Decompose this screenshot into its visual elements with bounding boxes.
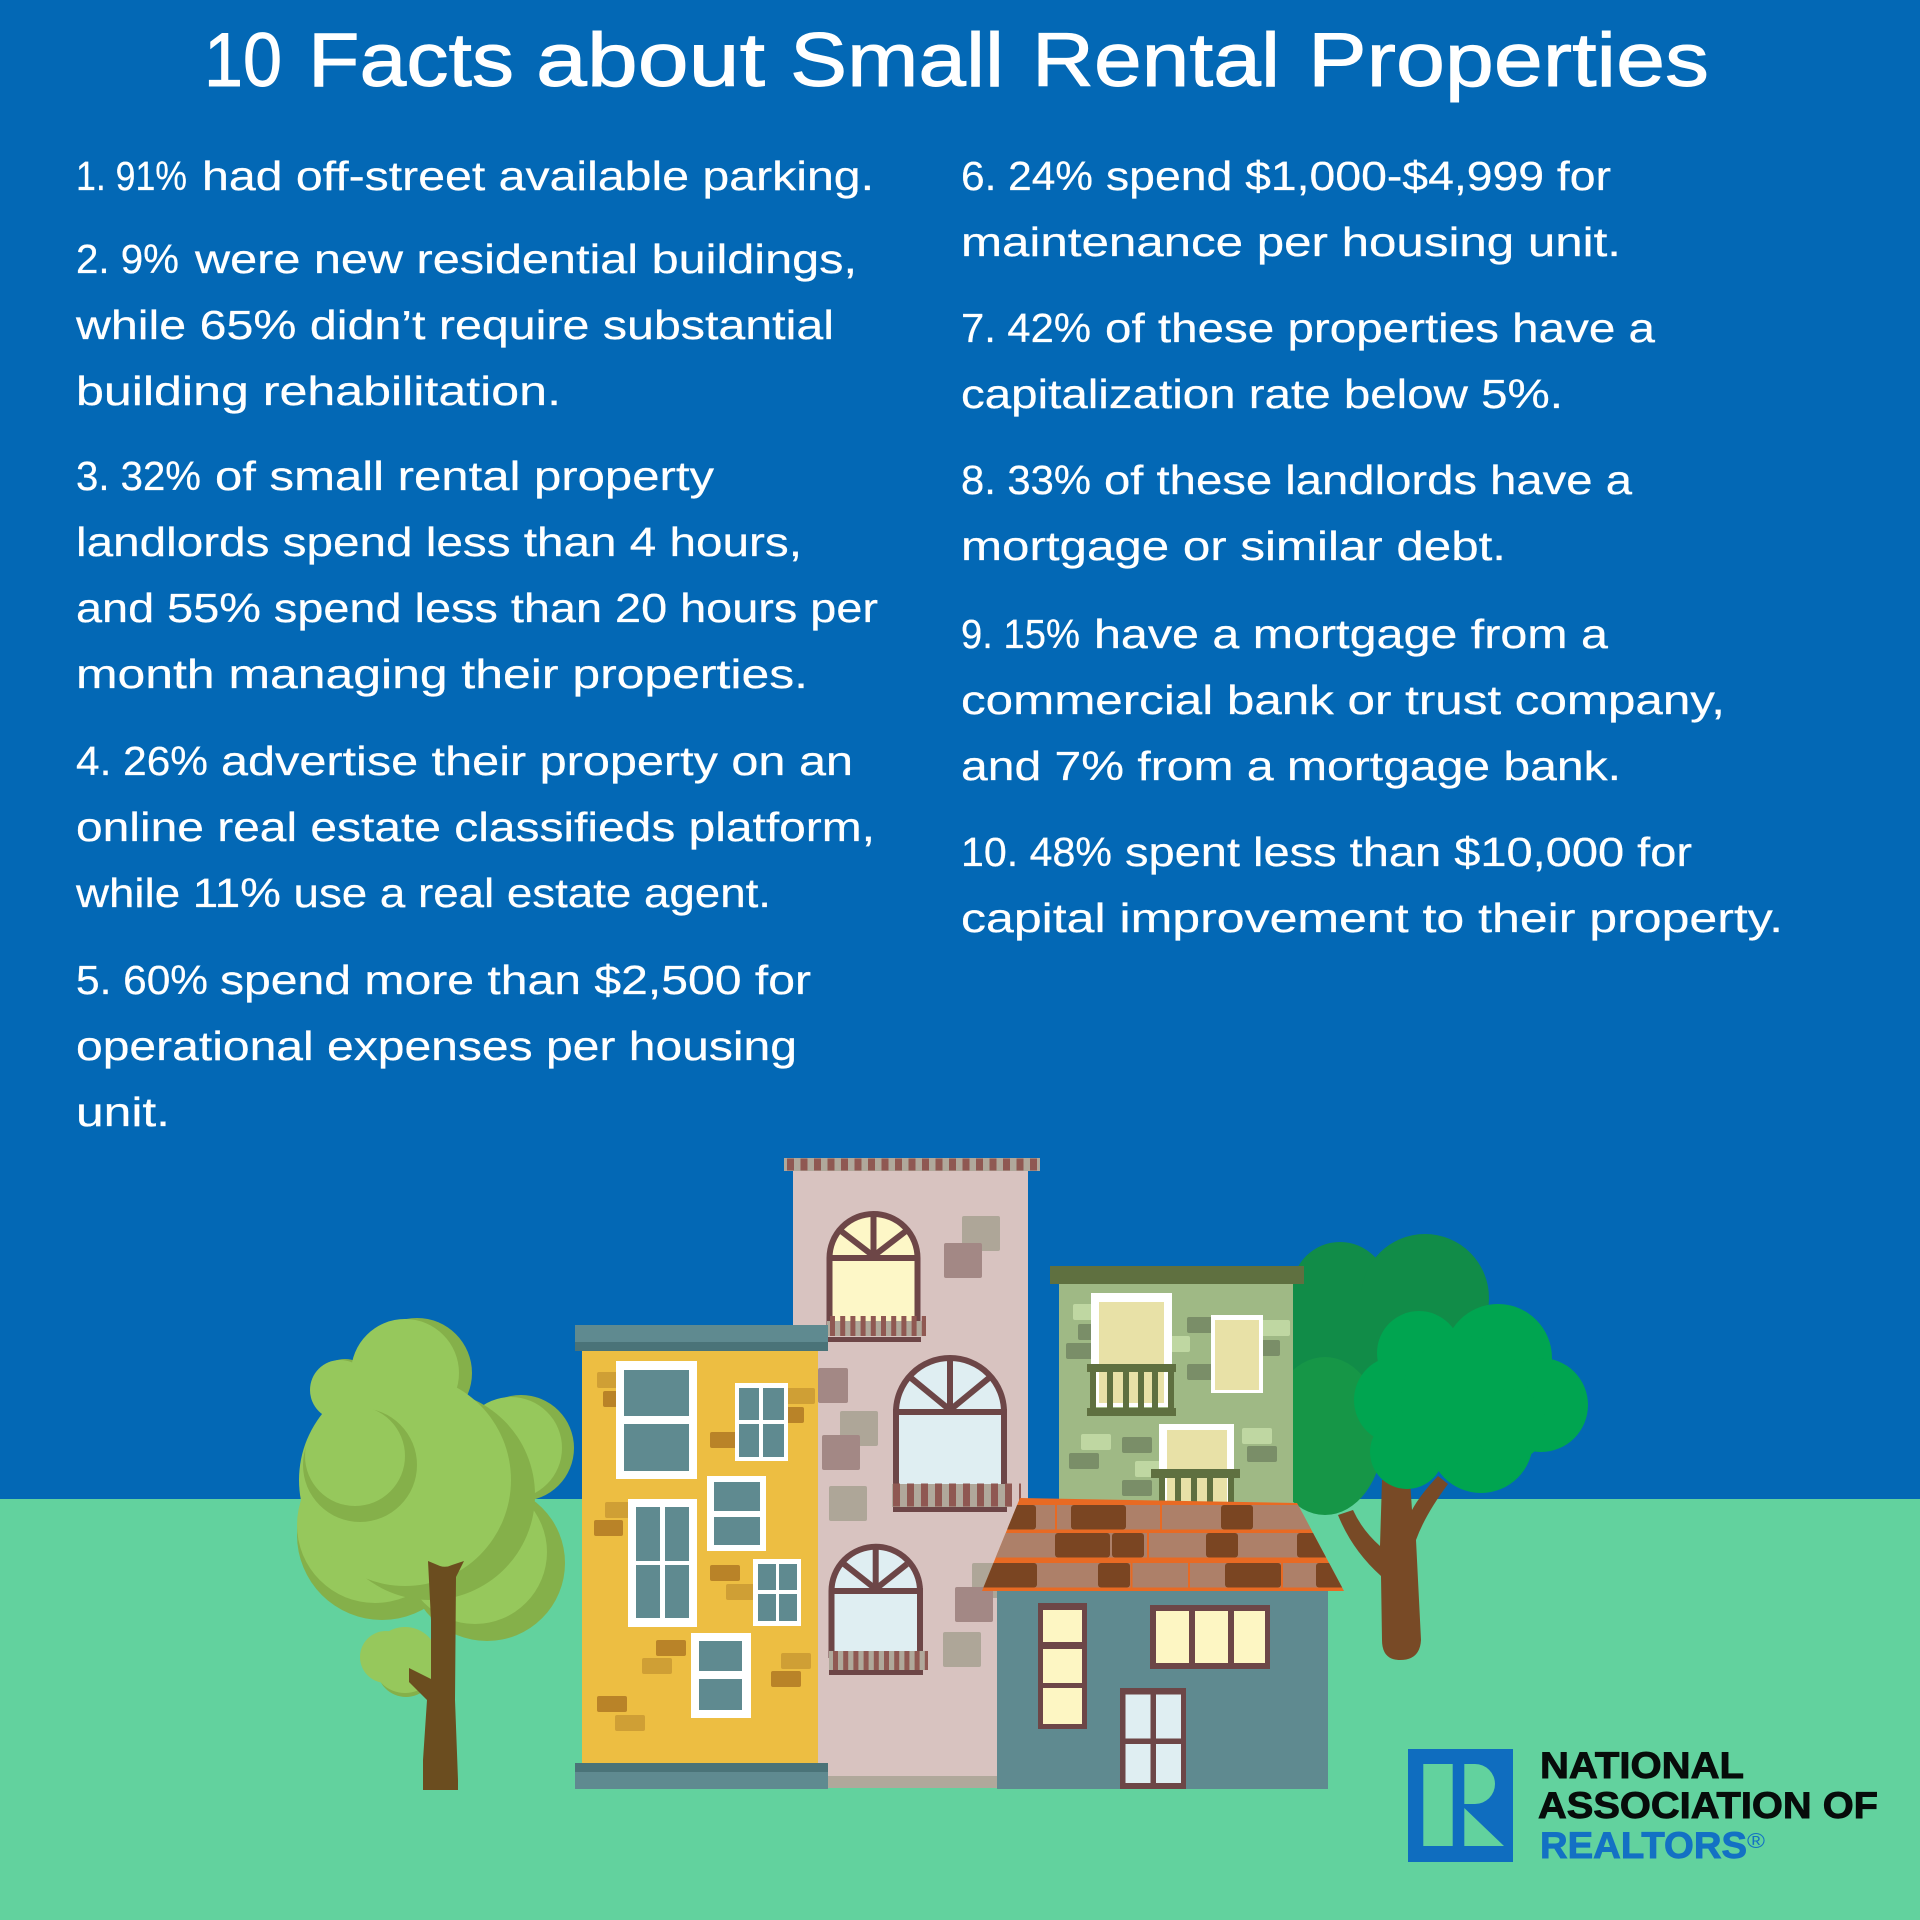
fact 9: have a mortgage from a	[1094, 611, 1608, 657]
fact 10: capital improvement to their property.	[961, 895, 1783, 941]
green building	[1050, 1266, 1304, 1503]
fact 4: while 11% use a real estate agent.	[75, 870, 771, 916]
fact 1: had off-street available parking.	[202, 153, 874, 199]
title: Rental	[1032, 18, 1280, 103]
fact 9: 9. 15%	[961, 611, 1080, 657]
yellow building	[575, 1325, 828, 1789]
logo wordmark: ASSOCIATION OF	[1538, 1785, 1878, 1826]
fact 9	[961, 611, 1725, 789]
arched window top	[827, 1214, 926, 1342]
fact 7	[961, 305, 1655, 417]
fact 7: of these properties have a	[1105, 305, 1655, 351]
title: Facts	[308, 18, 514, 103]
fact 3: 3. 32%	[76, 453, 201, 499]
fact 8: mortgage or similar debt.	[961, 523, 1506, 569]
fact 6: spend $1,000-$4,999 for	[1106, 153, 1611, 199]
logo wordmark: REALTORS	[1540, 1825, 1747, 1866]
house door	[1120, 1688, 1186, 1789]
fact 4: advertise their property on an	[221, 738, 853, 784]
roof	[980, 1498, 1346, 1591]
fact 10: spent less than $10,000 for	[1125, 829, 1692, 875]
fact 2: while 65% didn’t require substantial	[75, 302, 834, 348]
fact 4	[75, 738, 875, 916]
fact 8: 8. 33%	[961, 457, 1091, 503]
fact 2	[75, 236, 857, 414]
fact 3: landlords spend less than 4 hours,	[76, 519, 802, 565]
title: Properties	[1308, 18, 1709, 103]
green building windows and balconies	[1087, 1293, 1263, 1502]
fact 3: of small rental property	[215, 453, 715, 499]
fact 3: month managing their properties.	[76, 651, 808, 697]
ground	[0, 1499, 1920, 1920]
fact 5: 5. 60%	[76, 957, 208, 1003]
fact 5: unit.	[76, 1089, 170, 1135]
fact 2: building rehabilitation.	[76, 368, 561, 414]
fact 6	[961, 153, 1621, 265]
fact 9: commercial bank or trust company,	[961, 677, 1725, 723]
illustration: left tree	[297, 1318, 574, 1790]
logo wordmark: ®	[1747, 1830, 1766, 1853]
yellow building windows	[616, 1361, 801, 1718]
fact 7: 7. 42%	[961, 305, 1091, 351]
fact 9: and 7% from a mortgage bank.	[961, 743, 1621, 789]
fact 5: operational expenses per housing	[76, 1023, 797, 1069]
fact 2: were new residential buildings,	[194, 236, 857, 282]
fact 7: capitalization rate below 5%.	[961, 371, 1563, 417]
fact 8: of these landlords have a	[1104, 457, 1632, 503]
fact 6: 6. 24%	[961, 153, 1093, 199]
fact 1: 1. 91%	[76, 153, 187, 199]
logo: National Association of Realtors	[1408, 1745, 1878, 1866]
house wide window	[1150, 1605, 1270, 1669]
fact 4: online real estate classifieds platform,	[76, 804, 875, 850]
background sky	[0, 0, 1920, 1500]
fact 6: maintenance per housing unit.	[961, 219, 1621, 265]
arched window bottom	[829, 1547, 928, 1675]
pink building	[784, 1158, 1040, 1788]
fact 10: 10. 48%	[961, 829, 1112, 875]
title	[204, 18, 1709, 103]
fact 5: spend more than $2,500 for	[220, 957, 811, 1003]
small house	[980, 1498, 1346, 1789]
illustration: right tree	[1267, 1234, 1588, 1660]
logo wordmark	[1538, 1745, 1878, 1866]
fact 5	[76, 957, 811, 1135]
fact 8	[961, 457, 1632, 569]
title: Small	[790, 18, 1004, 103]
fact 2: 2. 9%	[76, 236, 179, 282]
fact 4: 4. 26%	[76, 738, 208, 784]
arched window middle	[892, 1358, 1021, 1512]
title: about	[536, 18, 765, 103]
logo wordmark: NATIONAL	[1540, 1745, 1744, 1786]
title: 10	[204, 18, 282, 103]
house tall window	[1038, 1603, 1087, 1729]
fact 3	[76, 453, 878, 697]
fact 3: and 55% spend less than 20 hours per	[76, 585, 878, 631]
logo mark	[1408, 1749, 1513, 1862]
fact 10	[961, 829, 1783, 941]
